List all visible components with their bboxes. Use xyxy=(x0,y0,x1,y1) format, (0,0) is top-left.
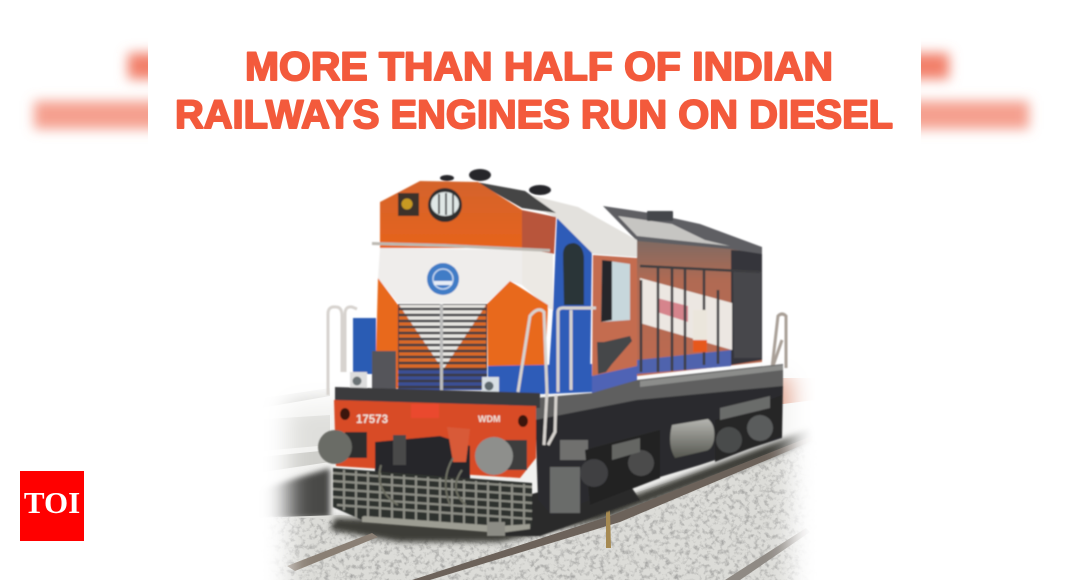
title xyxy=(175,45,893,137)
grille blue base xyxy=(398,368,487,390)
coupler recess xyxy=(375,436,470,490)
WDM mark: WDM xyxy=(478,414,500,424)
headlight xyxy=(428,188,462,222)
grille xyxy=(398,304,487,390)
centre hose stand xyxy=(393,435,406,465)
nose right orange panel xyxy=(487,281,548,368)
white hood panel xyxy=(693,310,707,352)
cab roof xyxy=(530,195,637,257)
emblem xyxy=(427,263,459,295)
loco number: 17573 xyxy=(356,414,388,426)
grille louvres xyxy=(398,309,487,387)
horns on roof xyxy=(440,169,551,195)
marker light xyxy=(398,193,419,216)
truck and wheels xyxy=(550,395,782,513)
lower nose blue band xyxy=(488,364,592,394)
cab window xyxy=(601,260,630,322)
fuel tank xyxy=(670,419,714,458)
running board highlight xyxy=(640,365,783,387)
beam holes xyxy=(340,408,528,427)
step plate on beam xyxy=(411,404,439,418)
long hood body xyxy=(637,240,762,376)
TOI logo badge xyxy=(20,471,84,541)
front deck xyxy=(335,387,540,408)
nose orange top xyxy=(380,181,522,248)
underbody shadow xyxy=(500,470,640,536)
track and ground photo xyxy=(269,378,809,580)
blurred background title, right xyxy=(905,53,1029,129)
deck headlamp boxes xyxy=(350,351,499,394)
grille orange right xyxy=(443,305,486,370)
title: RAILWAYS ENGINES RUN ON DIESEL xyxy=(175,93,893,137)
hood roof highlight xyxy=(618,216,730,246)
long hood blue stripe xyxy=(637,350,731,374)
red buffer beam xyxy=(334,400,536,478)
long hood vent doors xyxy=(733,272,761,358)
door window xyxy=(563,243,584,305)
nose handrails xyxy=(328,307,596,445)
locomotive xyxy=(318,169,786,536)
nose side panel xyxy=(522,210,556,254)
exhaust stack xyxy=(647,211,673,221)
cab blue door xyxy=(548,218,592,384)
cow catcher xyxy=(333,468,532,536)
orange hood panel xyxy=(693,340,707,352)
hood roof xyxy=(603,206,762,254)
TOI logo badge: TOI xyxy=(24,485,80,520)
hood door bars xyxy=(640,266,760,372)
right buffer xyxy=(475,437,527,475)
nose top dark slope xyxy=(476,182,556,213)
cab side xyxy=(592,255,637,391)
cab window dark pane xyxy=(601,260,612,322)
running board frame xyxy=(535,364,783,420)
cab side blue band xyxy=(592,366,637,394)
left buffer xyxy=(318,430,367,464)
grille orange left xyxy=(399,305,443,370)
coupler orange plate xyxy=(447,427,470,462)
blurred background title, left xyxy=(34,53,164,129)
rear handrail xyxy=(772,314,786,368)
rear blue box xyxy=(353,318,376,374)
cab side hand grip xyxy=(597,336,632,374)
grille white V xyxy=(399,305,486,370)
long hood white stripe xyxy=(640,278,732,350)
center white panel xyxy=(148,0,921,580)
long hood dark rear section xyxy=(731,250,762,365)
grille centre post xyxy=(440,304,443,390)
side white band xyxy=(522,248,553,310)
front white band xyxy=(378,248,522,303)
faded number on hood xyxy=(657,298,688,322)
title: MORE THAN HALF OF INDIAN xyxy=(245,45,833,89)
underframe xyxy=(535,384,783,516)
grab rail across nose xyxy=(372,242,550,252)
air hoses xyxy=(379,458,466,505)
nose left orange panel xyxy=(375,278,398,392)
